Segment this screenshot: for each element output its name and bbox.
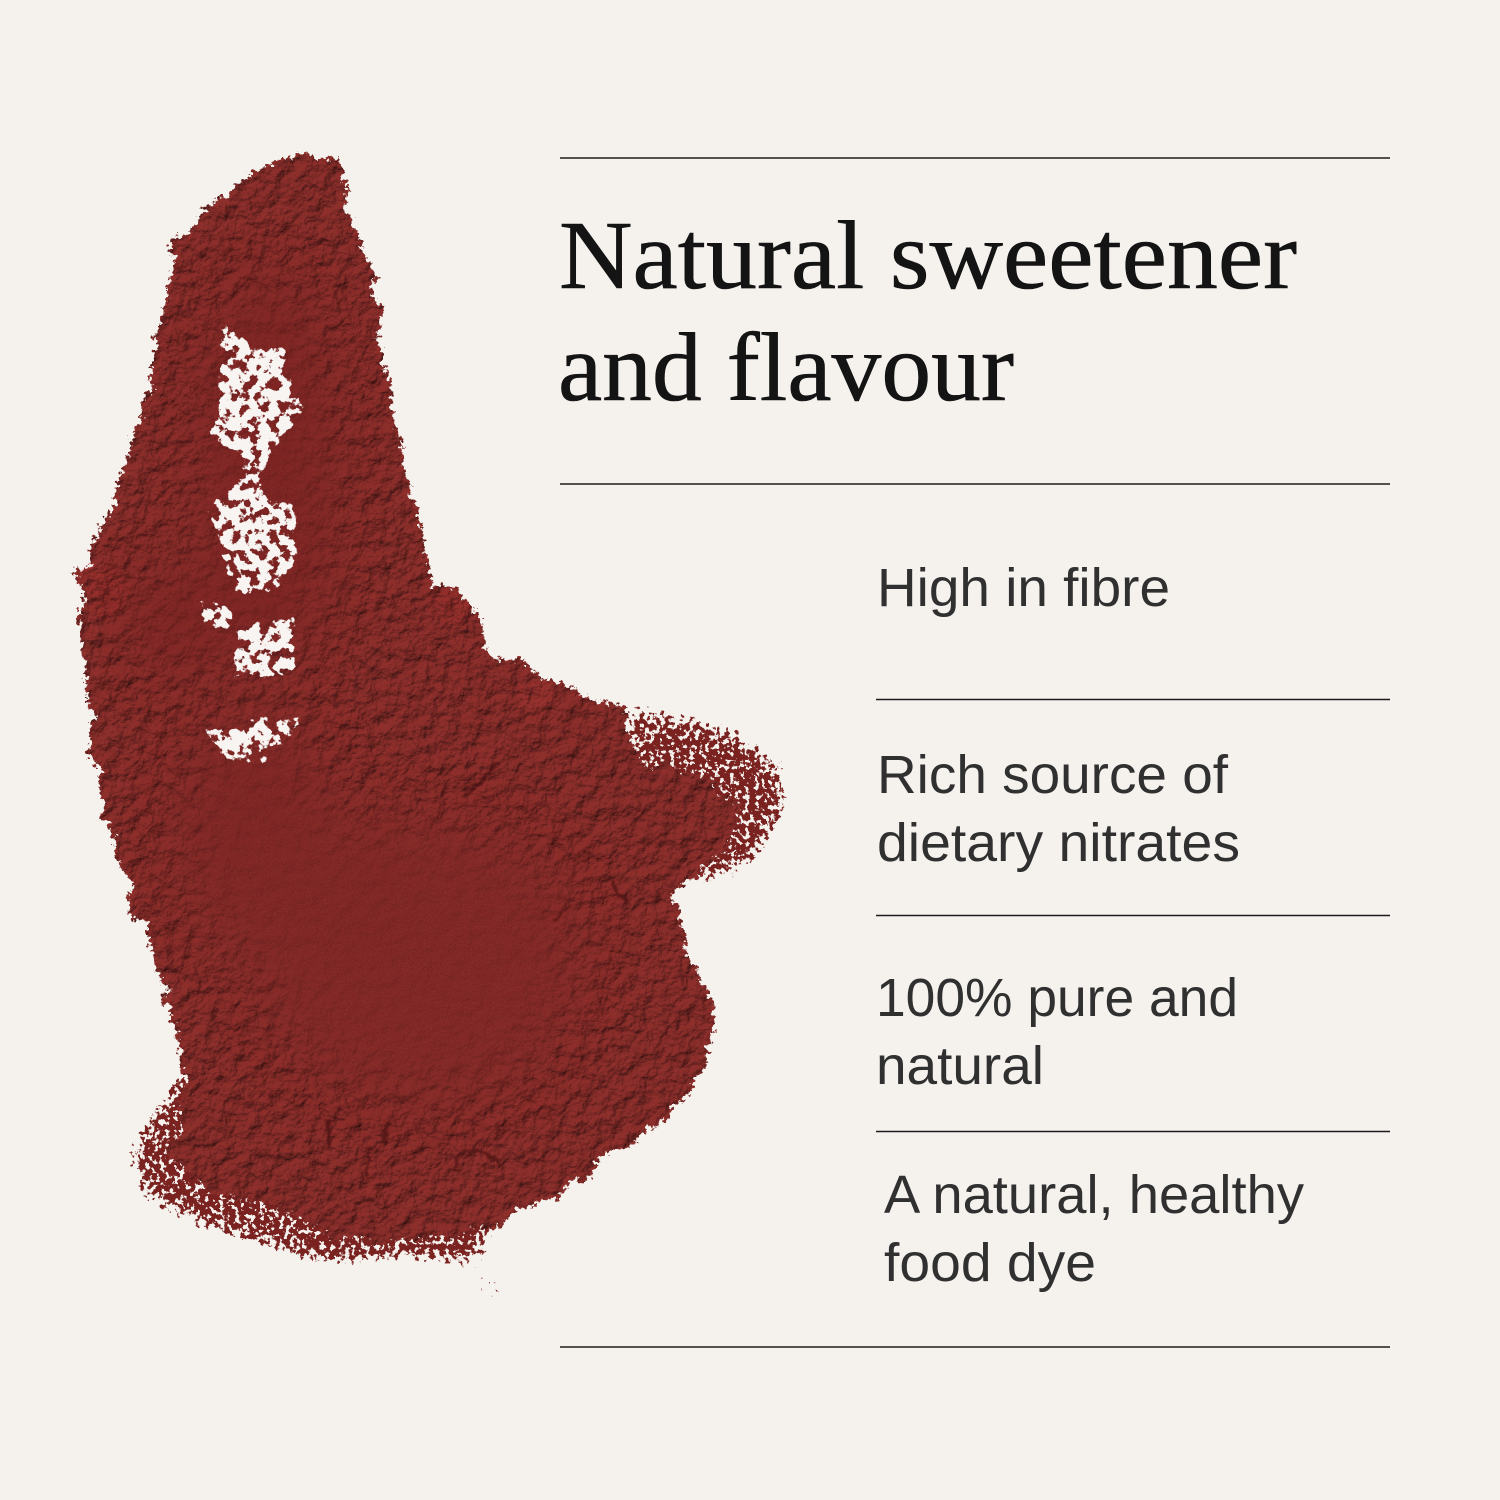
powder main shape [72,148,742,1240]
divider: below title [560,483,1390,485]
gaps in powder showing background [194,320,310,764]
benefit: a natural, healthy food dye: A natural, healthy [884,1165,1304,1225]
benefit: a natural, healthy food dye [884,1165,1304,1293]
image: red beetroot powder pile [72,148,790,1300]
benefit: 100% pure and natural: 100% pure and [876,968,1238,1028]
shadow cracks in the powder [328,765,625,1178]
divider: bottom [560,1346,1390,1348]
benefit: a natural, healthy food dye: food dye [884,1233,1096,1293]
benefit: rich source of dietary nitrates: dietary nitrates [877,813,1240,873]
title: and flavour [558,314,1014,422]
powder dust scatter [125,700,790,1300]
title: Natural sweetener [559,202,1297,310]
benefit: high in fibre: High in fibre [877,558,1170,618]
title [558,202,1297,422]
benefit: 100% pure and natural [876,968,1238,1096]
benefit: rich source of dietary nitrates [877,745,1240,873]
divider: top [560,157,1390,159]
benefit: rich source of dietary nitrates: Rich source of [877,745,1229,805]
smooth centre of the powder [140,280,570,1090]
benefit: 100% pure and natural: natural [876,1036,1044,1096]
